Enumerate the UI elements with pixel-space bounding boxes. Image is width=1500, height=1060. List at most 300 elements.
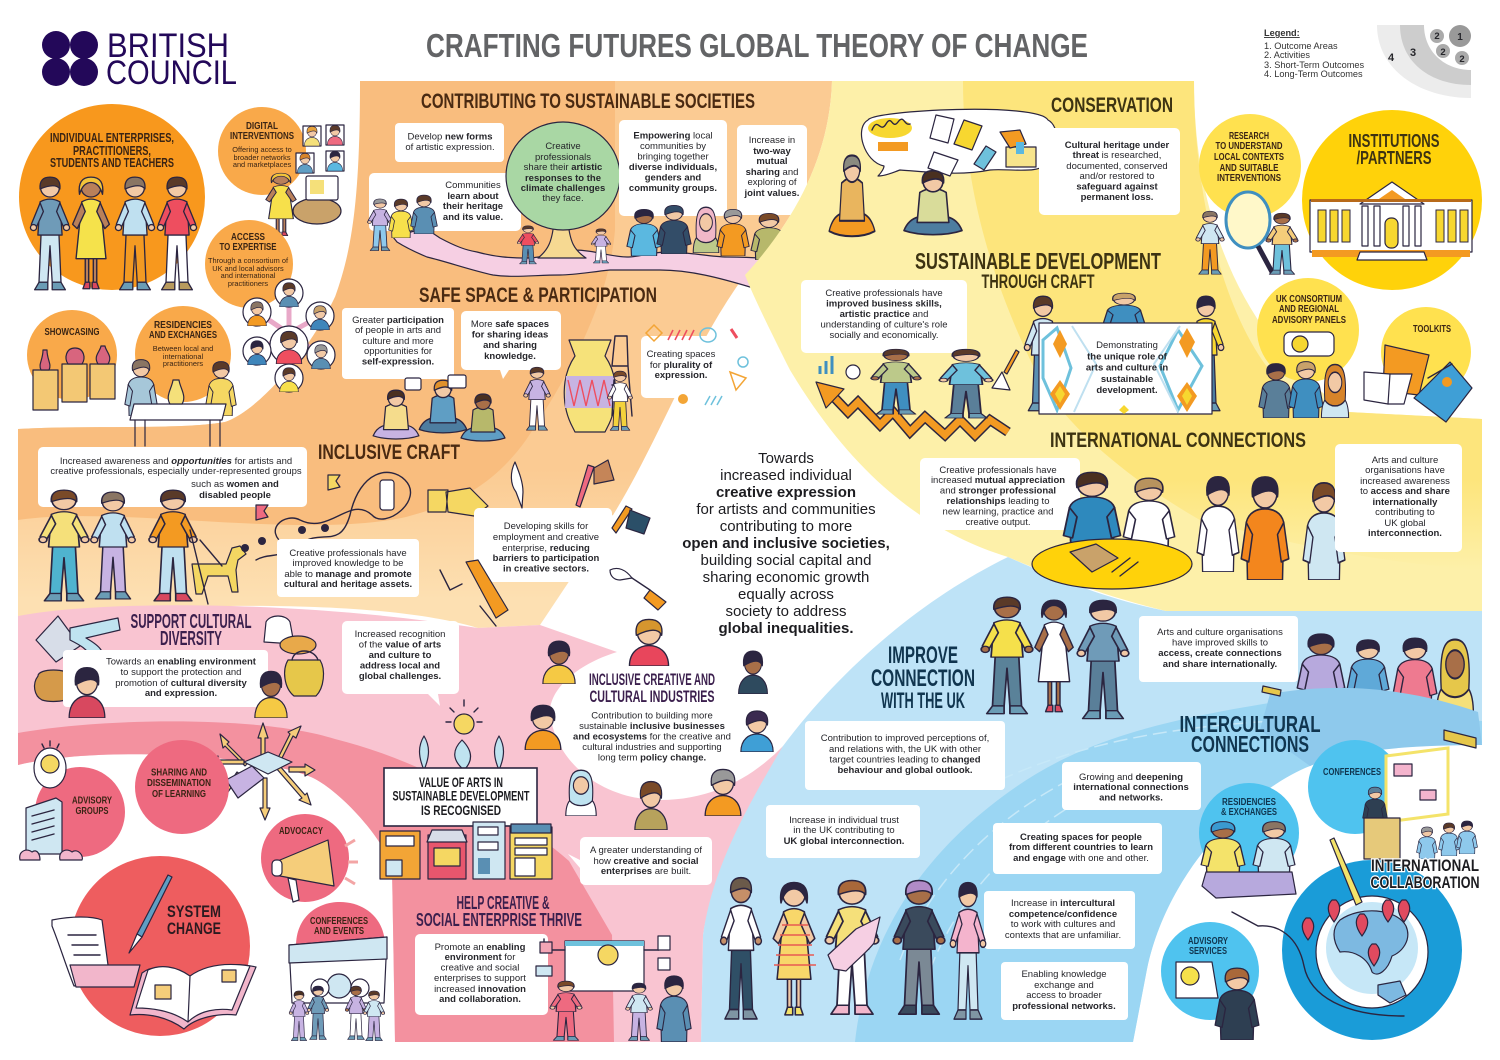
circle: digital interventions: Offering access to (232, 145, 292, 154)
text: intercultural competence: competence/confidence (1009, 909, 1117, 920)
box: value of arts recognised: IS RECOGNISED (421, 802, 501, 818)
text: arts organisations awareness: UK global (1384, 518, 1426, 529)
text: enabling knowledge (1001, 962, 1128, 1020)
text: developing skills with tools (440, 460, 666, 626)
circle: advisory groups: ADVISORY (72, 794, 112, 806)
icon: thought bubble with heritage cards (861, 109, 1057, 176)
heading: help creative and social enterprise thrive: SOCIAL ENTERPRISE THRIVE (416, 910, 582, 930)
carpet with demonstrating text: the unique role of (1087, 352, 1168, 362)
icon: idea board and team (536, 936, 691, 1042)
text: creating spaces with shapes: expression. (655, 370, 707, 381)
circle: access to expertise: TO EXPERTISE (220, 241, 276, 253)
text: creating spaces with shapes (641, 325, 748, 405)
circle: individual enterprises: INDIVIDUAL ENTERPRISES, (50, 131, 174, 145)
text: greater participation: of people in arts and (355, 325, 441, 336)
text: developing skills with tools: enterprise, reducing (502, 543, 590, 554)
circle: individual enterprises (19, 104, 205, 290)
circle: residencies and exchanges (1199, 783, 1299, 898)
icon: tree and tree crown: share their artistic (524, 162, 602, 173)
circle: toolkits (1364, 307, 1472, 422)
text: intercultural competence: Increase in intercultural (1011, 898, 1115, 909)
circle: individual enterprises: STUDENTS AND TEACHERS (50, 156, 174, 170)
text: cultural heritage: Cultural heritage under (1065, 140, 1170, 151)
text: increased recognition: Increased recognition (355, 629, 445, 640)
people with runner left (368, 195, 437, 251)
text: cultural heritage: threat is researched, (1073, 150, 1161, 161)
legend: 3. Short-Term Outcomes (1264, 60, 1364, 70)
text: promote enabling environment: increased innovation (434, 984, 526, 995)
title: CRAFTING FUTURES GLOBAL THEORY OF CHANGE (426, 27, 1088, 64)
text: growing connections: and networks. (1099, 792, 1163, 804)
text: develop new forms: of artistic expression. (405, 142, 495, 153)
heading: improve connection with the uk (871, 642, 975, 713)
text: improved business skills: Creative professionals have (825, 288, 943, 299)
text: arts organisations awareness: Arts and culture (1372, 455, 1438, 466)
text: growing connections: Growing and deepening (1079, 772, 1183, 783)
text: enabling environment: and expression. (145, 688, 217, 699)
text: improved business skills: improved business skills, (826, 298, 942, 310)
text: arts organisations awareness: internationally (1373, 497, 1438, 508)
circle: conferences and events: AND EVENTS (314, 925, 364, 937)
circle: conferences: CONFERENCES (1323, 766, 1381, 778)
legend: 1. Outcome Areas (1264, 41, 1338, 51)
three people waving (1197, 477, 1345, 580)
text: increased recognition: address local and (360, 660, 440, 672)
text: improved perceptions: Contribution to improved perceptions of, (821, 733, 989, 744)
text: two-way sharing: mutual (756, 156, 788, 167)
text: arts organisations awareness (1335, 444, 1462, 552)
british council logo (42, 27, 237, 92)
circle: access to expertise: ACCESS (231, 231, 265, 243)
text: arts organisations improved skills: Arts and culture organisations (1157, 627, 1283, 638)
text: more safe spaces: and sharing (483, 340, 537, 351)
text: growing connections: international connections (1073, 782, 1189, 793)
people at blue table (1260, 634, 1482, 766)
legend: 2. Activities (1264, 50, 1310, 60)
central statement: Towards (758, 450, 814, 467)
circle: uk consortium: ADVISORY PANELS (1272, 314, 1346, 326)
circle: residencies and exchanges: practitioners (163, 359, 203, 368)
people and guide dog (39, 490, 246, 604)
text: individual trust: in the UK contributing to (793, 825, 895, 836)
box: value of arts recognised: SUSTAINABLE DEVELOPMENT (392, 788, 530, 804)
circle: system change with scroll and book: SYSTEM (167, 902, 221, 921)
text: enabling knowledge: exchange and (1034, 980, 1094, 991)
central statement (682, 450, 890, 637)
box: value of arts recognised: VALUE OF ARTS IN (419, 774, 503, 790)
text: creative professionals knowledge: able to manage and promote (284, 569, 412, 580)
text: creating spaces with shapes: for plurality of (650, 360, 713, 371)
circle: access to expertise (205, 220, 293, 308)
text: creating spaces for people: Creating spaces for people (1020, 832, 1142, 843)
circle: international collaboration globe (1232, 838, 1480, 1040)
icon: institution building (1310, 182, 1472, 260)
heading: safe space and participation: SAFE SPACE & PARTICIPATION (419, 284, 657, 307)
people row (721, 878, 986, 1019)
text: increased recognition (342, 621, 459, 706)
text: increased awareness (38, 447, 307, 516)
icon: tree and tree crown: professionals (535, 152, 591, 163)
heading: sustainable development through craft (915, 248, 1161, 293)
plants and bulb (420, 700, 504, 770)
legend: 3 (1410, 47, 1416, 59)
text: arts organisations improved skills (1139, 616, 1298, 682)
text: communities: learn about (447, 191, 499, 202)
text: develop new forms: Develop new forms (407, 132, 493, 142)
text: intercultural competence: to work with cultures and (1011, 919, 1115, 930)
faces around circle (525, 619, 773, 830)
text: developing skills with tools: in creative sectors. (503, 564, 589, 574)
carpet with demonstrating text: Demonstrating (1096, 340, 1158, 351)
circle: residencies and exchanges: RESIDENCIES (1222, 796, 1276, 808)
central statement: global inequalities. (718, 620, 854, 637)
circle: system change with scroll and book (52, 856, 256, 1036)
text: two-way sharing: two-way (753, 146, 791, 157)
text: empowering: Empowering local (633, 130, 713, 142)
circle: advocacy with megaphone: ADVOCACY (279, 825, 323, 837)
text: contribution to inclusive businesses: cultural industries and supporting (582, 742, 722, 753)
circle: research: TO UNDERSTAND (1216, 140, 1283, 152)
text: enabling knowledge: professional networks. (1012, 1001, 1116, 1012)
box: value of arts recognised (384, 768, 537, 826)
circle: individual enterprises: PRACTITIONERS, (73, 144, 151, 158)
walking group (981, 597, 1129, 719)
text: two-way sharing: sharing and (746, 167, 798, 178)
text: mutual appreciation: and stronger professional (940, 486, 1056, 496)
text: contribution to inclusive businesses (573, 710, 731, 764)
text: enabling environment (63, 650, 268, 707)
carpet with demonstrating text: arts and culture in (1086, 362, 1168, 374)
heading: help creative and social enterprise thrive (416, 893, 582, 930)
craft objects (35, 616, 323, 702)
carpet with demonstrating text (1024, 293, 1224, 414)
text: improved perceptions: target countries leading to changed (829, 754, 981, 766)
heading: support cultural diversity (130, 611, 252, 650)
text: cultural heritage (1039, 128, 1180, 215)
text: intercultural competence: contexts that are unfamiliar. (1005, 930, 1121, 941)
text: individual trust (766, 805, 920, 858)
text: communities (369, 173, 521, 231)
text: creative professionals knowledge: Creative professionals have (289, 548, 407, 559)
text: individual trust: Increase in individual trust (789, 815, 899, 826)
text: individual trust: UK global interconnection. (784, 836, 904, 847)
circle: system change with scroll and book: CHANGE (167, 919, 221, 938)
text: improved business skills: socially and economically. (829, 330, 939, 341)
carpet with demonstrating text: sustainable (1101, 374, 1153, 385)
text: creative professionals knowledge: cultural and heritage assets. (284, 579, 412, 590)
text: two-way sharing: Increase in (749, 135, 795, 146)
text: improved business skills: artistic practice and (840, 309, 928, 320)
text: more safe spaces: knowledge. (484, 351, 536, 362)
circle: research: RESEARCH (1229, 130, 1269, 142)
circle: uk consortium (1257, 278, 1359, 418)
circle: showcasing: SHOWCASING (44, 326, 100, 338)
text: promote enabling environment: and collaboration. (439, 994, 521, 1005)
circle: advisory services: SERVICES (1189, 945, 1227, 957)
text: more safe spaces (461, 311, 561, 379)
text: develop new forms (395, 123, 504, 162)
legend: 2 (1434, 31, 1440, 42)
central statement: open and inclusive societies, (682, 535, 890, 552)
text: mutual appreciation: Creative professionals have (939, 465, 1057, 476)
text: greater participation: self-expression. (362, 356, 434, 368)
text: empowering: genders and (645, 172, 701, 184)
text: increased awareness: such as women and (191, 479, 279, 490)
central statement: equally across (738, 586, 834, 603)
person and pottery vase (524, 336, 632, 432)
panel: pink outcome area (18, 605, 783, 1042)
text: increased recognition: and culture to (369, 650, 432, 661)
circle: research: AND SUITABLE (1220, 162, 1278, 174)
people at table (627, 205, 787, 260)
runner cloth (393, 228, 793, 287)
text: mutual appreciation (920, 458, 1080, 530)
text: increased awareness: Increased awareness and opportunities for artists and (60, 456, 292, 467)
text: improved business skills: understanding of culture's role (821, 320, 947, 330)
heading: intercultural connections: CONNECTIONS (1191, 731, 1309, 757)
panel: yellow outcome area (745, 81, 1482, 611)
legend (1264, 25, 1471, 98)
text: communities: Communities (445, 180, 501, 191)
text: promote enabling environment: Promote an enabling (435, 942, 526, 953)
text: cultural heritage: permanent loss. (1081, 192, 1153, 203)
circle: advisory services: ADVISORY (1188, 935, 1228, 947)
legend: 2 (1440, 47, 1446, 58)
circle: advisory groups: GROUPS (76, 805, 108, 817)
circle: institutions and partners: /PARTNERS (1356, 148, 1432, 168)
legend: 4. Long-Term Outcomes (1264, 69, 1363, 79)
circle: access to expertise: Through a consortium of (208, 256, 289, 265)
circle: sharing and dissemination: DISSEMINATION (147, 777, 211, 789)
text: two-way sharing (737, 125, 807, 215)
text: empowering: bringing together (637, 152, 709, 162)
heading: support cultural diversity: SUPPORT CULTURAL (130, 611, 252, 633)
text: contribution to inclusive businesses: and ecosystems for the creative and (573, 732, 731, 742)
heading: improve connection with the uk: CONNECTION (871, 665, 975, 692)
text: growing connections (1062, 762, 1201, 810)
text: enabling environment: Towards an enabling environment (106, 656, 257, 668)
carpet with demonstrating text: development. (1096, 385, 1158, 396)
legend: 1 (1457, 32, 1463, 43)
heading: conservation: CONSERVATION (1051, 94, 1173, 117)
icon: tree and tree crown: they face. (542, 193, 584, 204)
text: mutual appreciation: creative output. (966, 517, 1030, 528)
central statement: society to address (726, 603, 846, 620)
circle: institutions and partners: INSTITUTIONS (1348, 131, 1440, 151)
text: developing skills with tools: employment and creative (493, 532, 599, 543)
text: contribution to inclusive businesses: Contribution to building more (591, 710, 713, 722)
text: arts organisations awareness: organisations have (1365, 465, 1445, 476)
heading: international connections: INTERNATIONAL CONNECTIONS (1050, 429, 1306, 452)
shop row (380, 822, 552, 879)
circle: conferences and events (289, 902, 387, 1041)
text: creating spaces for people: from different countries to learn (1009, 842, 1153, 853)
circle: access to expertise: UK and local advisors (212, 264, 284, 273)
text: developing skills with tools: Developing skills for (504, 521, 588, 532)
circle: sharing and dissemination: SHARING AND (151, 766, 207, 778)
text: arts organisations improved skills: and share internationally. (1163, 659, 1277, 670)
heading: inclusive creative and cultural industries: CULTURAL INDUSTRIES (590, 687, 714, 706)
text: two-way sharing: joint values. (744, 188, 799, 199)
circle: uk consortium: AND REGIONAL (1279, 303, 1339, 315)
heading: inclusive creative and cultural industries (589, 670, 715, 706)
central statement: creative expression (716, 484, 856, 501)
circle: residencies and exchanges: Between local and (153, 344, 213, 353)
text: enabling environment: to support the protection and (121, 667, 241, 678)
circle: advocacy with megaphone (261, 814, 358, 902)
heading: intercultural connections (1180, 711, 1320, 757)
text: promote enabling environment (415, 934, 548, 1015)
circle: digital interventions: INTERVENTIONS (230, 130, 294, 142)
text: empowering: diverse individuals, (629, 162, 717, 173)
legend: 4 (1388, 52, 1395, 64)
central statement: sharing economic growth (703, 569, 869, 586)
icon: tree and tree crown: Creative (545, 141, 581, 152)
text: arts organisations awareness: contributing to (1375, 507, 1435, 518)
text: greater understanding: how creative and social (593, 856, 699, 867)
circle: residencies and exchanges: international (163, 352, 203, 361)
icon: tree and tree crown (506, 122, 620, 264)
circle: access to expertise: practitioners (228, 279, 268, 288)
text: arts organisations awareness: increased awareness (1360, 476, 1450, 487)
text: empowering (619, 120, 727, 216)
text: communities: and its value. (443, 212, 503, 223)
heading: support cultural diversity: DIVERSITY (160, 628, 222, 650)
circle: advisory groups (20, 741, 125, 860)
text: enabling knowledge: access to broader (1026, 990, 1102, 1001)
heading: contributing to sustainable societies: CONTRIBUTING TO SUSTAINABLE SOCIETIES (421, 90, 755, 113)
circle: showcasing (27, 310, 117, 410)
circle: sharing and dissemination: OF LEARNING (152, 788, 206, 800)
circle: institutions and partners (1302, 110, 1482, 290)
text: increased awareness: creative professionals, especially under-represented groups (50, 466, 302, 477)
text: greater participation (342, 308, 454, 379)
text: creating spaces for people (993, 823, 1162, 874)
seated group with speech cards (373, 375, 505, 441)
circle: toolkits: TOOLKITS (1413, 323, 1451, 335)
circle: residencies and exchanges (125, 306, 236, 446)
legend: 2 (1459, 54, 1465, 65)
panel: orange outcome area (18, 81, 832, 628)
text: developing skills with tools: barriers to participation (493, 553, 600, 564)
text: more safe spaces: for sharing ideas (472, 330, 548, 340)
central statement: increased individual (720, 467, 852, 484)
flag and thread path (241, 472, 488, 560)
central statement: contributing to more (720, 518, 852, 535)
text: creating spaces for people: and engage with one and other. (1013, 853, 1149, 864)
circle: access to expertise: and international (221, 271, 276, 280)
icon: tree and tree crown: responses to the (525, 173, 601, 184)
text: empowering: communities by (640, 141, 706, 152)
heading: improve connection with the uk: WITH THE UK (881, 688, 965, 713)
heading: sustainable development through craft: SUSTAINABLE DEVELOPMENT (915, 248, 1161, 274)
text: greater participation: Greater participation (352, 315, 444, 326)
text: arts organisations improved skills: access, create connections (1158, 648, 1282, 659)
text: two-way sharing: exploring of (747, 177, 797, 188)
circle: advisory services (1161, 922, 1259, 1040)
text: communities: their heritage (443, 201, 503, 212)
text: promote enabling environment: creative and social (441, 962, 519, 974)
central statement: for artists and communities (696, 501, 876, 518)
text: cultural heritage: documented, conserved (1066, 161, 1168, 172)
text: contribution to inclusive businesses: sustainable inclusive businesses (579, 721, 725, 732)
two busts (69, 668, 287, 718)
text: increased recognition: global challenges. (359, 671, 441, 682)
heading: help creative and social enterprise thrive: HELP CREATIVE & (456, 893, 550, 913)
icon: advisor network (243, 279, 335, 392)
heading: inclusive creative and cultural industries: INCLUSIVE CREATIVE AND (589, 670, 715, 689)
text: increased awareness: disabled people (199, 490, 271, 501)
text: mutual appreciation: new learning, practice and (943, 506, 1053, 518)
legend: Legend: (1264, 28, 1300, 38)
circle: research: INTERVENTIONS (1217, 172, 1281, 184)
text: cultural heritage: and/or restored to (1080, 171, 1154, 182)
heading: improve connection with the uk: IMPROVE (888, 642, 958, 669)
text: arts organisations awareness: interconnection. (1368, 528, 1442, 539)
text: more safe spaces: More safe spaces (471, 319, 549, 330)
circle: conferences and events: CONFERENCES (310, 915, 368, 927)
heading: sustainable development through craft: THROUGH CRAFT (982, 272, 1095, 293)
circle: residencies and exchanges: & EXCHANGES (1221, 806, 1277, 818)
text: promote enabling environment: enterprises to support (434, 973, 526, 984)
text: promote enabling environment: environment for (445, 952, 515, 963)
text: improved business skills (801, 280, 967, 353)
text: improved perceptions: and relations with, the UK with other (829, 744, 981, 755)
text: improved perceptions: behaviour and global outlook. (837, 765, 973, 776)
british council logo: BRITISH (107, 27, 229, 65)
panel: blue outcome area (701, 557, 1482, 1042)
text: mutual appreciation: relationships leading to (947, 496, 1049, 507)
text: greater understanding: enterprises are built. (601, 866, 691, 877)
text: improved perceptions (805, 721, 1005, 790)
heading: inclusive craft: INCLUSIVE CRAFT (318, 441, 460, 464)
circle: research: LOCAL CONTEXTS (1214, 151, 1284, 163)
zigzag growth arrow and runners (816, 349, 1019, 435)
text: contribution to inclusive businesses: long term policy change. (598, 752, 706, 764)
text: arts organisations awareness: to access and share (1360, 486, 1450, 497)
circle: research (1196, 114, 1301, 274)
text: enabling knowledge: Enabling knowledge (1021, 969, 1107, 980)
circle: uk consortium: UK CONSORTIUM (1276, 293, 1342, 305)
text: creating spaces with shapes: Creating spaces (647, 349, 716, 360)
text: greater understanding (568, 837, 712, 885)
text: greater participation: culture and more (362, 336, 434, 347)
circle: sharing and dissemination (135, 740, 229, 834)
text: greater understanding: A greater understanding of (590, 845, 702, 856)
text: creative professionals knowledge: improved knowledge to be (293, 558, 403, 569)
text: increased recognition: of the value of arts (359, 640, 441, 650)
central statement: building social capital and (701, 552, 871, 569)
craft makers left (829, 155, 962, 236)
circle: residencies and exchanges: RESIDENCIES (154, 319, 212, 331)
text: empowering: community groups. (629, 183, 717, 194)
icon: tree and tree crown: climate challenges (521, 183, 605, 194)
text: creative professionals knowledge (277, 539, 419, 597)
text: enabling environment: promotion of cultural diversity (115, 678, 247, 689)
circle: digital interventions: and marketplaces (233, 160, 291, 169)
text: greater participation: opportunities for (364, 346, 432, 357)
circle: digital interventions: DIGITAL (246, 120, 278, 132)
table with craft tools and two people (1032, 472, 1192, 589)
icon: graduation cap arrows (208, 723, 315, 820)
circle: digital interventions (218, 107, 344, 236)
british council logo: COUNCIL (106, 54, 237, 92)
text: mutual appreciation: increased mutual appreciation (931, 475, 1065, 486)
text: arts organisations improved skills: have improved skills to (1172, 638, 1268, 648)
text: intercultural competence (984, 891, 1135, 949)
heading: intercultural connections: INTERCULTURAL (1180, 711, 1320, 737)
text: cultural heritage: safeguard against (1076, 182, 1158, 192)
